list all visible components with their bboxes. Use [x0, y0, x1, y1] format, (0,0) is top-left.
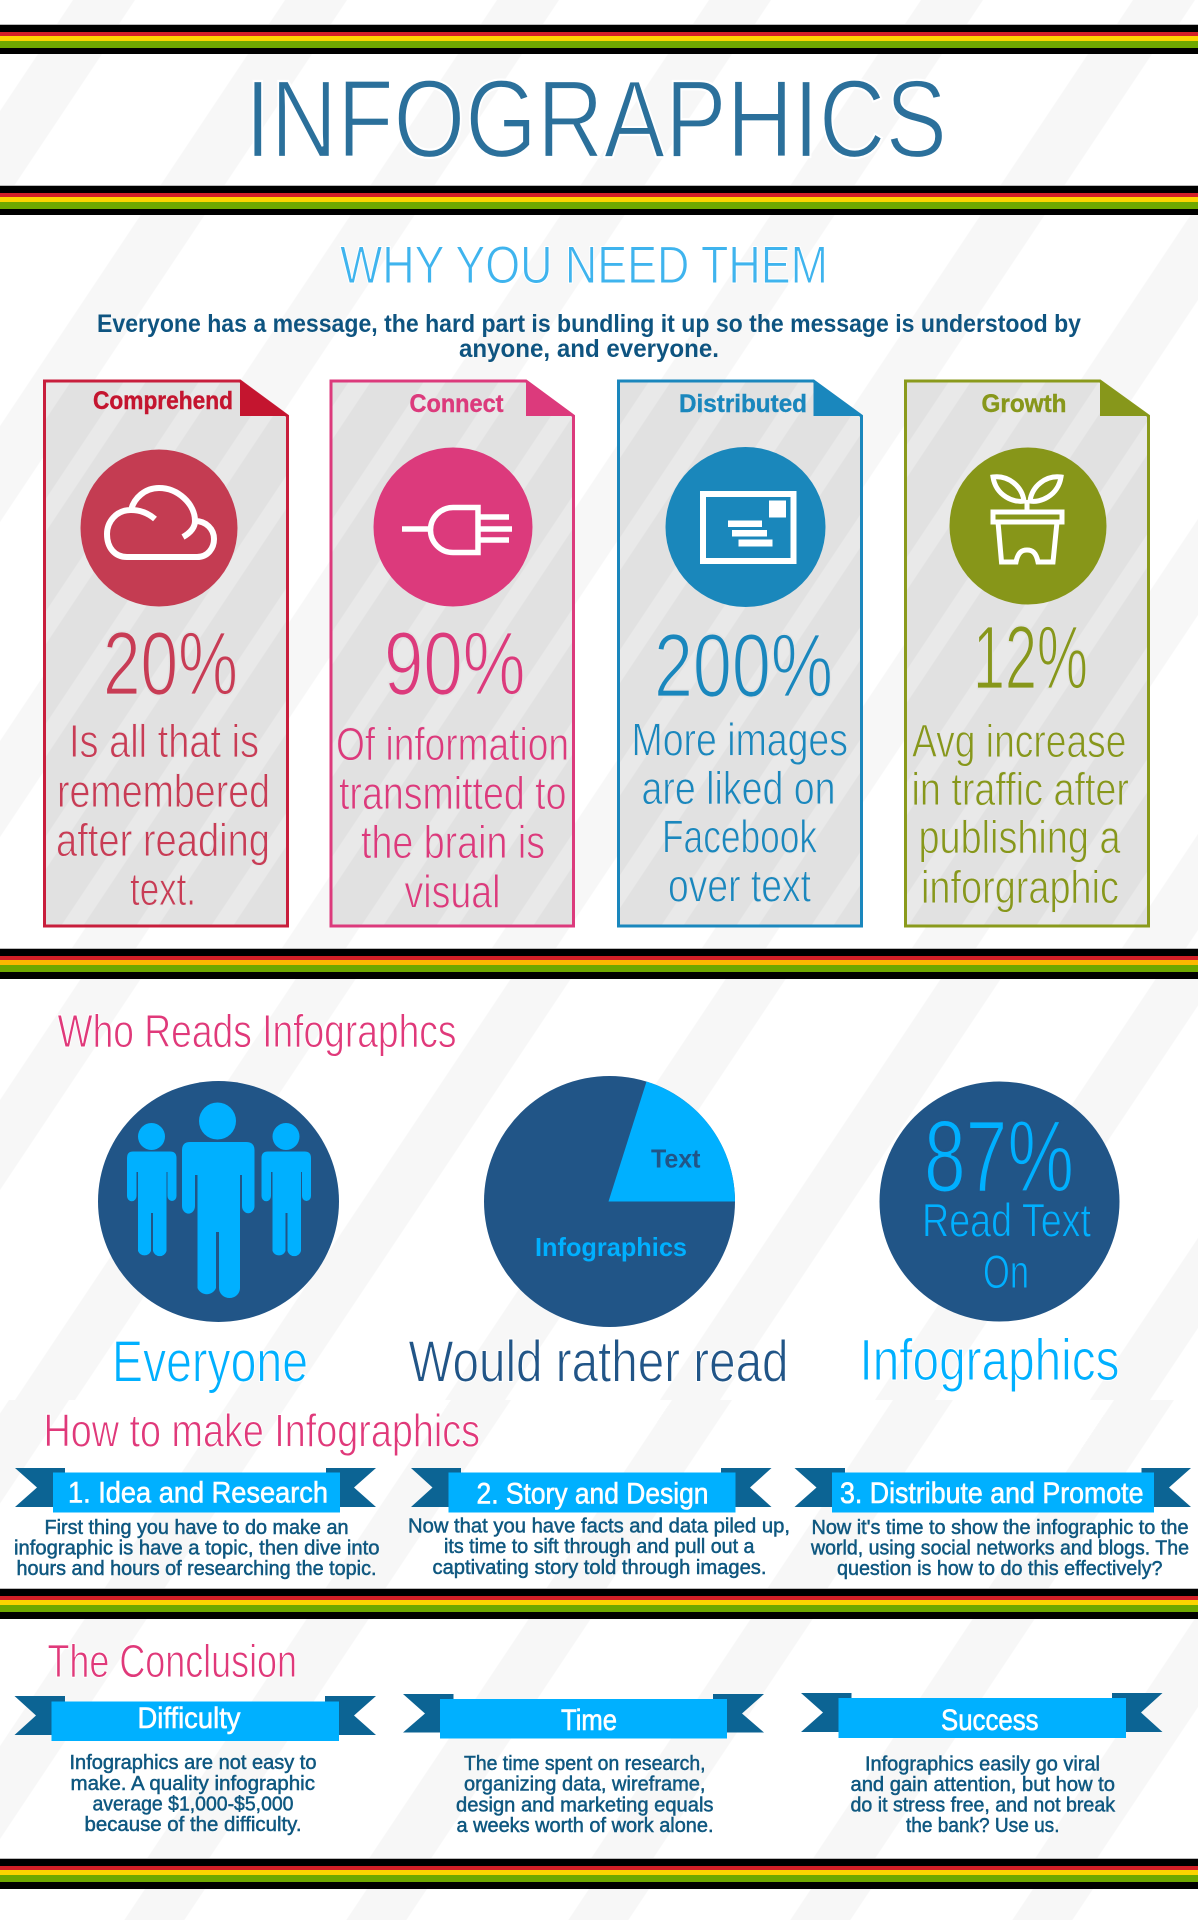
striped divider 2	[0, 185, 1198, 215]
striped divider 3	[0, 948, 1198, 979]
text: story and design: its time to sift through and pull out a	[444, 1535, 755, 1558]
ribbon: distribute and promote: 3. Distribute and Promote	[840, 1477, 1144, 1510]
description: the brain is	[361, 816, 545, 868]
text: time: a weeks worth of work alone.	[456, 1814, 714, 1837]
text: distribute and promote: world, using social networks and blogs. The	[810, 1536, 1189, 1560]
striped divider 5	[0, 1858, 1198, 1889]
intro text: anyone, and everyone.	[459, 335, 719, 363]
caption: would rather read: Would rather read	[408, 1330, 788, 1394]
text: success: the bank? Use us.	[906, 1814, 1060, 1837]
description	[632, 714, 848, 912]
striped divider 1	[0, 24, 1198, 54]
icon: postcard	[666, 447, 826, 607]
fold corner	[1100, 380, 1150, 416]
panel: comprehend	[44, 380, 289, 926]
description	[336, 718, 569, 918]
text: time: design and marketing equals	[456, 1794, 714, 1816]
text: difficulty	[70, 1751, 316, 1836]
caption: everyone: Everyone	[112, 1330, 308, 1394]
stat: 20%	[103, 614, 238, 714]
text: distribute and promote: Now it's time to show the infographic to the	[812, 1516, 1188, 1539]
description: More images	[632, 714, 848, 766]
text: difficulty: Infographics are not easy to	[70, 1751, 316, 1774]
text: idea and research: hours and hours of researching the topic.	[16, 1557, 376, 1580]
fold corner	[240, 380, 289, 416]
section heading: the conclusion: The Conclusion	[48, 1635, 297, 1687]
description: transmitted to	[339, 767, 566, 819]
text: story and design: captivating story told through images.	[432, 1556, 766, 1579]
text: idea and research: infographic is have a topic, then dive into	[14, 1536, 380, 1560]
panel: distributed	[618, 380, 863, 926]
striped divider 4	[0, 1588, 1198, 1619]
text: story and design: Now that you have facts and data piled up,	[408, 1514, 790, 1538]
text: difficulty: average $1,000-$5,000	[92, 1792, 294, 1816]
text: difficulty: because of the difficulty.	[84, 1813, 302, 1836]
stat circle: 87%: 87%	[924, 1100, 1074, 1214]
text: time: organizing data, wireframe,	[464, 1772, 706, 1796]
icon: people circle	[98, 1081, 339, 1322]
ribbon: success	[801, 1693, 1162, 1738]
ribbon: time: Time	[561, 1704, 617, 1737]
description: visual	[404, 866, 500, 918]
section heading: how to make: How to make Infographics	[44, 1404, 480, 1456]
text: time: The time spent on research,	[464, 1752, 706, 1775]
description: Is all that is	[69, 715, 259, 767]
ribbon: time	[403, 1694, 764, 1738]
description	[56, 715, 270, 915]
icon: plant	[950, 448, 1106, 604]
ribbon: idea and research: 1. Idea and Research	[68, 1476, 328, 1510]
pie chart	[484, 1076, 735, 1327]
text: success: Infographics easily go viral	[865, 1752, 1100, 1776]
description: text.	[130, 863, 196, 915]
panel: growth	[906, 380, 1150, 926]
ribbon: idea and research	[15, 1468, 376, 1512]
description: in traffic after	[912, 763, 1129, 815]
panel: connect	[331, 380, 575, 926]
section heading: why you need them: WHY YOU NEED THEM	[340, 236, 828, 295]
description: Facebook	[662, 810, 818, 862]
intro text: Everyone has a message, the hard part is bundling it up so the message is understood by	[97, 310, 1081, 338]
pie label: infographics: Infographics	[535, 1232, 687, 1262]
pie label: text: Text	[651, 1144, 701, 1174]
description: over text	[668, 860, 811, 912]
fold corner	[814, 380, 863, 416]
stat: 90%	[384, 614, 526, 714]
text: difficulty: make. A quality infographic	[70, 1772, 315, 1795]
stat circle: 87%	[880, 1082, 1120, 1322]
label: Growth	[982, 390, 1066, 418]
description: inforgraphic	[921, 861, 1119, 913]
text: story and design	[408, 1514, 790, 1579]
label: Comprehend	[93, 387, 233, 415]
text: idea and research	[14, 1516, 380, 1580]
ribbon: story and design	[411, 1468, 772, 1512]
description	[912, 715, 1129, 913]
ribbon: difficulty: Difficulty	[138, 1702, 240, 1735]
stat: 200%	[654, 616, 833, 716]
label: Distributed	[679, 390, 807, 418]
title: INFOGRAPHICS	[245, 58, 947, 181]
description: Of information	[336, 718, 569, 770]
label: Connect	[410, 390, 504, 418]
ribbon: story and design: 2. Story and Design	[476, 1478, 708, 1510]
stat: 12%	[973, 608, 1088, 708]
icon: cloud	[80, 450, 238, 606]
text: distribute and promote	[810, 1516, 1189, 1580]
stat circle: 87%: On	[983, 1245, 1029, 1298]
text: idea and research: First thing you have to do make an	[44, 1516, 348, 1539]
text: success: do it stress free, and not break	[850, 1794, 1116, 1816]
description: are liked on	[642, 762, 836, 814]
section heading: who reads: Who Reads Infographcs	[58, 1005, 456, 1057]
text: time	[456, 1752, 714, 1837]
description: remembered	[57, 765, 270, 817]
ribbon: success: Success	[941, 1704, 1038, 1737]
stat circle: 87%: Read Text	[922, 1194, 1091, 1246]
description: publishing a	[918, 811, 1121, 863]
fold corner	[526, 380, 575, 416]
ribbon: distribute and promote	[794, 1468, 1191, 1512]
description: after reading	[56, 814, 270, 866]
description: Avg increase	[912, 715, 1126, 767]
text: success: and gain attention, but how to	[850, 1773, 1115, 1796]
icon: plug	[374, 448, 532, 606]
caption: infographics: Infographics	[860, 1328, 1120, 1393]
ribbon: difficulty	[14, 1696, 376, 1741]
intro text	[97, 310, 1081, 363]
text: success	[850, 1752, 1116, 1837]
text: distribute and promote: question is how to do this effectively?	[837, 1557, 1162, 1580]
